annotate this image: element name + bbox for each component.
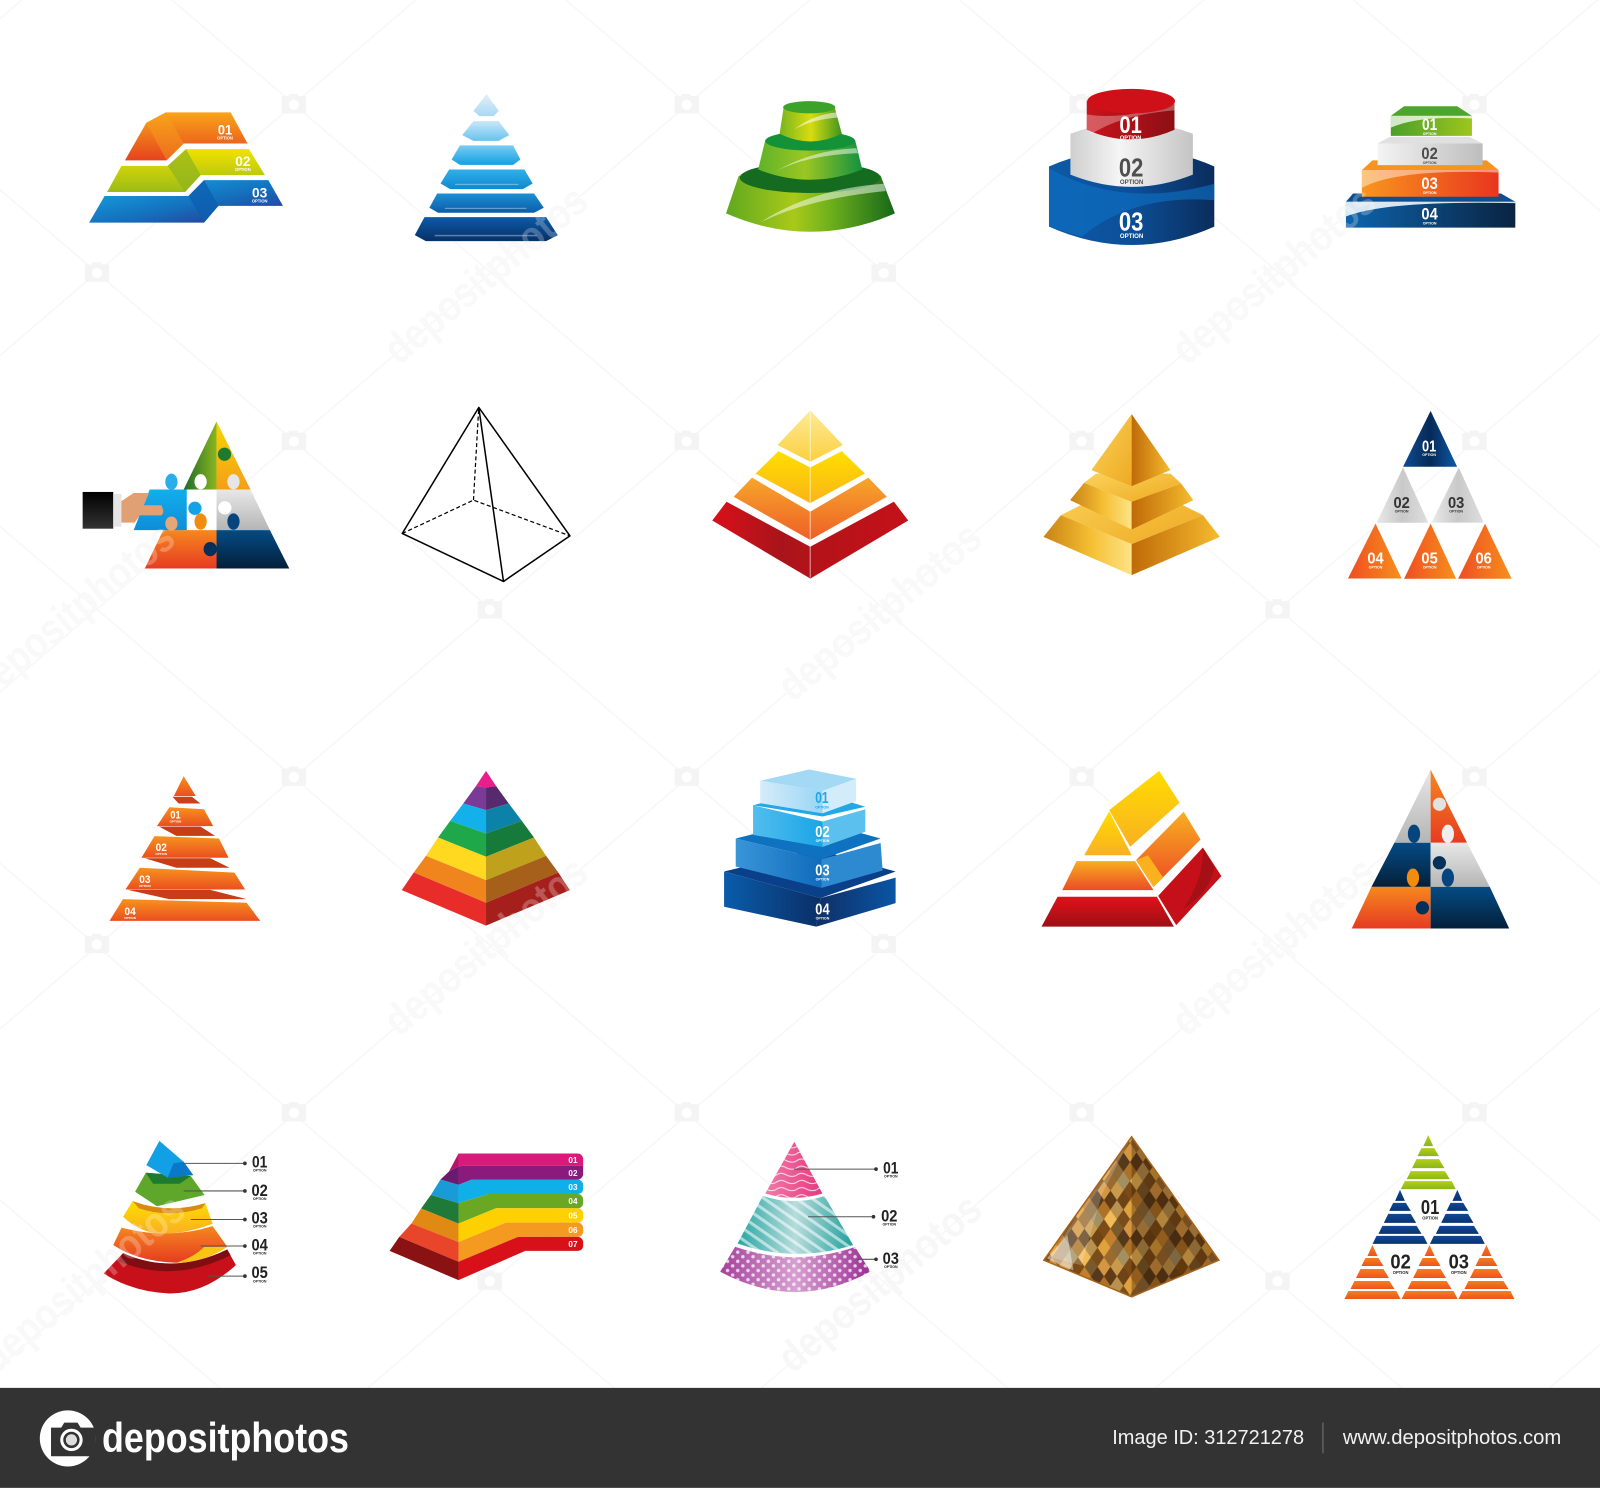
layer 05 red [104,1250,236,1293]
tabs [458,1153,583,1280]
icon: gold stepped pyramid [1043,414,1220,575]
label 02: OPTION [816,839,830,843]
number 03 with caption: 03 [1421,175,1438,193]
bottom right navy piece [1431,887,1509,928]
label 03: OPTION [816,878,830,882]
top left piece green [184,422,217,490]
label 01: OPTION [815,805,829,809]
label 03: 03 [1449,1251,1469,1273]
number 01 with caption: OPTION [217,135,233,140]
icon: blue sliced pyramid [415,94,558,241]
icon: puzzle pyramid with hand [83,422,289,568]
label 01: OPTION [253,1169,267,1173]
bottom tier [726,176,895,232]
caption 02: OPTION [1120,179,1143,186]
layer 04 orange [113,1226,227,1263]
label 03: OPTION [139,884,151,888]
label 03: 03 [252,1210,268,1228]
icon: camera logo [40,1410,96,1466]
teal striped tier [738,1196,853,1254]
icon: six triangle pyramid [1348,411,1512,579]
label 03: 03 [815,863,830,880]
top right orange piece [1431,770,1467,843]
label 04: OPTION [124,916,136,920]
watermark lines, cameras and words behind the icons: depositphotos [1162,848,1385,1045]
bottom left piece orange [145,530,217,568]
brand name: depositphotos [102,1414,349,1461]
number 01: 01 [1119,112,1142,139]
footer bar [0,1388,1600,1488]
bottom right piece navy [217,530,289,568]
tab numbers [568,1156,578,1249]
watermark overlay on icons: depositphotos [1162,848,1385,1045]
watermark overlay on icons: depositphotos [1162,176,1385,374]
tier 03 blue [1049,149,1214,245]
watermark overlay on icons: depositphotos [375,176,597,374]
number 03 with caption: 03 [252,186,267,202]
step 02 grey [1378,137,1483,143]
watermark lines, cameras and words behind the icons: depositphotos [1162,176,1385,374]
icon: triangle of sliced pyramids [1344,1135,1514,1299]
tier 01 red [1087,101,1174,139]
label 06: 06 [1476,550,1492,567]
pink wavy tier [765,1142,822,1198]
number 04 with caption: OPTION [1423,222,1437,226]
icon: wireframe pyramid [402,407,570,581]
icon: red white blue cake [1049,89,1214,245]
label 02: OPTION [1395,509,1409,513]
icon: patterned cone with labels [720,1142,899,1292]
label 06: OPTION [1477,565,1491,569]
layer 3 [734,478,887,540]
layer 01 blue [146,1141,193,1178]
triangle 06 [1458,524,1512,579]
white gap [187,490,217,530]
icon: blue stacked boxes [724,770,896,927]
layer 1 [778,410,843,462]
hand [121,493,163,523]
watermark lines, cameras and words behind the icons: depositphotos [769,1185,991,1382]
website: www.depositphotos.com [1342,1427,1561,1449]
label 02: OPTION [882,1223,897,1227]
middle right grey piece [1431,843,1490,887]
label 01: 01 [883,1160,898,1178]
watermark lines, cameras and words behind the icons: depositphotos [769,513,991,711]
watermark overlay on icons: depositphotos [375,848,597,1045]
layer 02 green [135,1173,204,1206]
number 01 with caption: OPTION [1423,132,1437,136]
label 04: 04 [252,1237,268,1255]
number 02 with caption: OPTION [1423,161,1437,165]
label 03: 03 [139,874,151,886]
icon: red orange yellow layered pyramid [712,410,908,579]
top left grey piece [1394,770,1431,843]
label 01: 01 [1422,439,1437,456]
triangle 02 [1377,467,1428,523]
label 05: OPTION [253,1279,267,1283]
label 03: OPTION [253,1225,267,1229]
label 01: OPTION [1422,1216,1438,1221]
step 03 orange [1362,160,1499,170]
band 02 green [107,149,265,192]
tab numbers: 06 [568,1226,578,1235]
label 05: OPTION [1423,565,1437,569]
watermark lines, cameras and words behind the icons: depositphotos [375,848,597,1045]
label 04: OPTION [253,1252,267,1256]
tab numbers: 05 [568,1211,578,1220]
divider [1322,1423,1323,1453]
label 04: 04 [1367,550,1384,567]
hand sleeve [83,492,113,529]
icon: brown mosaic pyramid [1044,1137,1219,1297]
layer 2 [756,451,865,503]
icon: stepped three band pyramid [89,112,283,223]
number 02 with caption: 02 [1421,145,1438,163]
icon: five layer curved pyramid with labels [104,1141,268,1293]
layer 03 yellow [123,1201,213,1234]
top right piece gold [217,422,251,490]
watermark overlay on icons: depositphotos [769,513,991,711]
number 03 with caption: OPTION [1423,191,1437,195]
triangle 03 [1432,467,1484,523]
tier 02 white [1070,122,1193,187]
label 03: OPTION [1449,509,1463,513]
orange sliced pyramids [1344,1245,1400,1299]
icon: orange sliced pyramid [109,776,260,921]
icon: rainbow pyramid [402,771,570,926]
label 03: 03 [883,1250,899,1268]
number 04 with caption: 04 [1421,206,1438,224]
label 04: 04 [124,906,136,918]
label 05: 05 [1421,550,1438,567]
triangle 05 [1404,524,1456,579]
label 02: 02 [156,842,167,854]
navy sliced pyramids [1373,1190,1427,1244]
step 04 navy [1346,193,1515,202]
watermark lines, cameras and words behind the icons: depositphotos [375,176,597,374]
connector lines [184,1163,244,1276]
label 03: 03 [1448,495,1464,512]
number 01 with caption: 01 [218,122,232,138]
step 01 green [1391,106,1472,116]
number 03: 03 [1119,209,1143,237]
band 03 blue [89,180,283,223]
number 01 with caption: 01 [1422,116,1437,134]
tab numbers: 02 [568,1169,578,1178]
label 01: 01 [170,809,181,821]
triangle 01 [1403,411,1457,467]
label 04: OPTION [816,917,830,921]
label 02: OPTION [1393,1270,1408,1275]
icon: red orange yellow cut pyramid [1042,771,1221,927]
middle tier [1070,483,1132,530]
number 02 with caption: 02 [235,154,251,170]
label 02: OPTION [253,1197,267,1201]
label 01: 01 [815,790,829,807]
image id: Image ID: 312721278 [1112,1427,1304,1449]
icon: puzzle triangle [1352,770,1509,928]
label 03: OPTION [1451,1270,1467,1275]
label 02: 02 [881,1208,897,1226]
label 03: OPTION [884,1265,898,1269]
middle left navy piece [1371,843,1431,887]
tab numbers: 01 [568,1156,578,1165]
middle tier [758,140,862,180]
icon: rainbow pyramid with tabs [390,1153,583,1280]
label 01: 01 [1421,1197,1439,1219]
layer 4 [712,502,908,578]
label 01: OPTION [170,820,181,824]
triangle 04 [1348,524,1402,578]
watermark overlay on icons [0,176,1385,1382]
label 01: 01 [252,1153,267,1171]
tab numbers: 07 [568,1240,578,1249]
box 04 [724,849,896,898]
purple dotted tier [720,1247,870,1292]
label 01: OPTION [1422,453,1436,457]
top tier [1091,414,1132,486]
box 01 [760,770,856,791]
icon: green tiered cone [726,101,895,232]
tab numbers: 03 [568,1183,578,1192]
bottom tier [1043,515,1132,575]
top tier [780,107,842,141]
label 02: 02 [1393,495,1410,512]
label 01: OPTION [884,1175,898,1179]
label 04: 04 [815,901,830,918]
tab numbers: 04 [568,1197,578,1206]
box 03 [736,820,881,859]
number 03 with caption: OPTION [252,199,268,204]
label 02: OPTION [155,852,167,856]
number 02 with caption: OPTION [235,167,251,172]
label 05: 05 [252,1264,268,1282]
green sliced pyramid [1401,1135,1456,1189]
label 02: 02 [252,1182,268,1200]
grey piece [217,490,270,530]
box 02 [753,790,865,816]
shirt cuff [113,494,121,527]
icon: stair pyramid [1346,106,1515,228]
left face bands [390,1153,458,1280]
caption 01: OPTION [1120,135,1141,141]
band 01 orange [125,112,248,160]
label 02: 02 [1390,1251,1411,1273]
label 02: 02 [815,824,830,841]
number 02: 02 [1119,155,1143,183]
bottom left orange piece [1352,887,1431,928]
blue puzzle piece in hand [134,490,187,530]
label 04: OPTION [1369,565,1383,569]
connector lines [794,1169,876,1259]
caption 03: OPTION [1120,233,1143,240]
